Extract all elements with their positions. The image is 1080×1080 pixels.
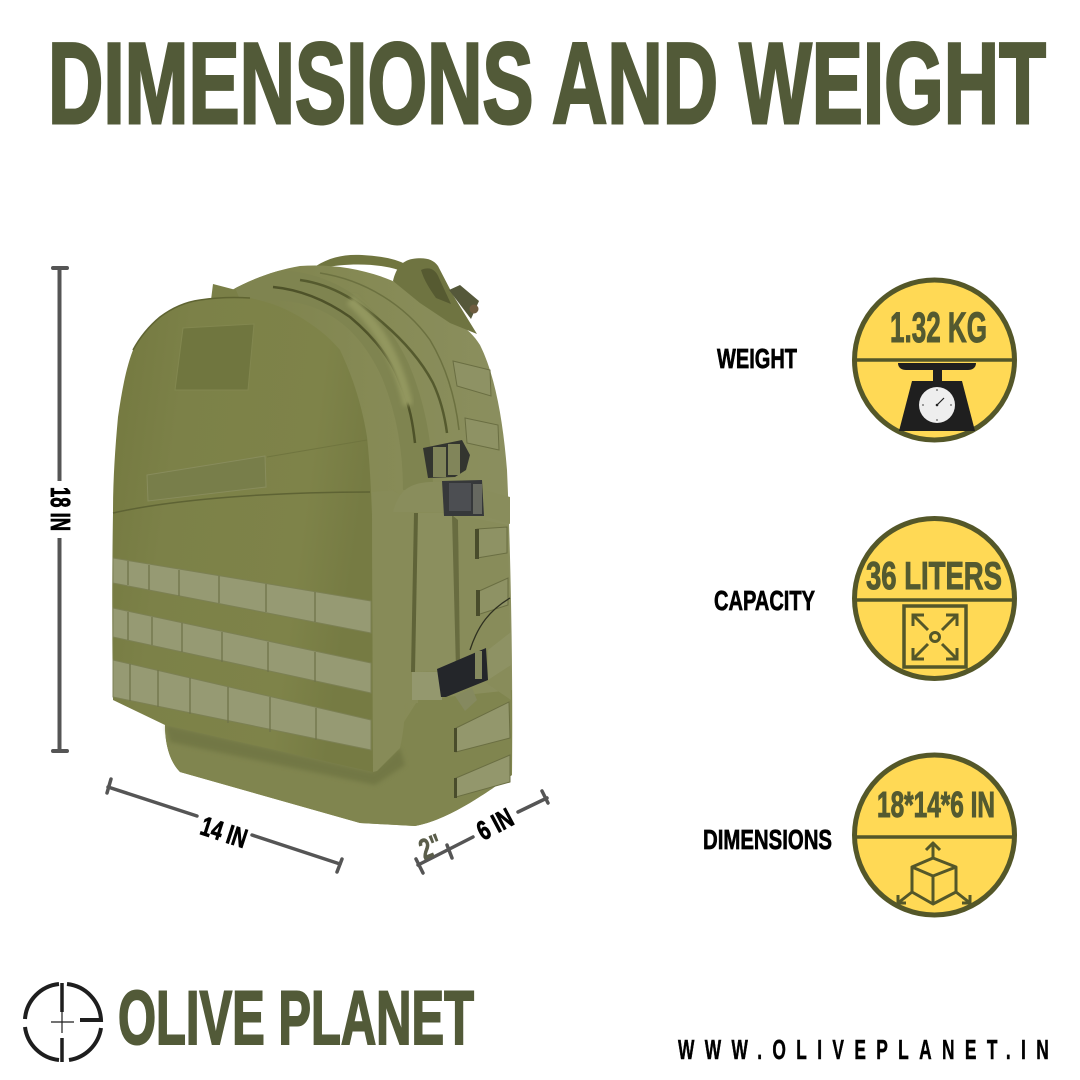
weight value: 1.32 KG bbox=[890, 304, 987, 352]
lower side strap bbox=[488, 632, 511, 680]
upper ladder buckle bbox=[423, 440, 470, 478]
label: weight: WEIGHT bbox=[717, 343, 797, 374]
side pocket bbox=[372, 490, 418, 772]
panel top edge bbox=[133, 297, 250, 350]
badge: weight bbox=[853, 280, 1016, 440]
webbing stitching bbox=[128, 561, 316, 740]
icon: expanding box bbox=[904, 606, 966, 667]
side gusset column bbox=[412, 513, 458, 672]
dimension: 18 in height: 18 IN bbox=[45, 487, 76, 531]
strap to side buckle bbox=[393, 482, 445, 512]
dimension: 14 in width: 14 IN bbox=[197, 811, 251, 854]
side molle loops bbox=[453, 361, 510, 797]
label: dimensions: DIMENSIONS bbox=[703, 824, 832, 855]
dimensions value: 18*14*6 IN bbox=[877, 784, 995, 825]
top handle bbox=[316, 255, 407, 271]
zipper gussets bbox=[235, 273, 459, 490]
dimension: 14 in width bbox=[107, 779, 342, 872]
lower release buckle bbox=[412, 598, 510, 711]
front panel bbox=[112, 297, 373, 772]
icon: kitchen scale bbox=[898, 363, 976, 431]
side panel bbox=[458, 515, 511, 700]
webbing straps bbox=[113, 558, 371, 750]
brand name: OLIVE PLANET bbox=[118, 976, 474, 1061]
carry strap loop bbox=[393, 258, 479, 334]
icon: cube with arrows bbox=[898, 843, 970, 904]
dimension: 2 inch pocket: 2" bbox=[415, 829, 447, 866]
badge: capacity bbox=[853, 518, 1016, 678]
dimension: 18 in height bbox=[45, 268, 76, 751]
back nub bbox=[211, 284, 240, 300]
capacity value: 36 LITERS bbox=[866, 555, 1002, 598]
velcro strip bbox=[147, 456, 266, 501]
panel seam bbox=[113, 492, 370, 513]
dimension: 6 in depth bbox=[415, 791, 548, 873]
velcro patch bbox=[175, 324, 254, 390]
website: WWW.OLIVEPLANET.IN bbox=[678, 1034, 1049, 1065]
lower body base bbox=[165, 690, 512, 826]
base shadow under flap bbox=[165, 725, 405, 785]
side release buckle bbox=[442, 480, 484, 516]
backpack illustration bbox=[112, 255, 512, 826]
badge: dimensions bbox=[853, 755, 1016, 915]
dimension: 6 in depth: 6 IN bbox=[472, 802, 518, 846]
logo mark: crosshair bbox=[25, 983, 101, 1062]
loop dark slits bbox=[454, 529, 480, 798]
label: capacity: CAPACITY bbox=[714, 585, 815, 616]
main body and side panel bbox=[165, 265, 512, 826]
